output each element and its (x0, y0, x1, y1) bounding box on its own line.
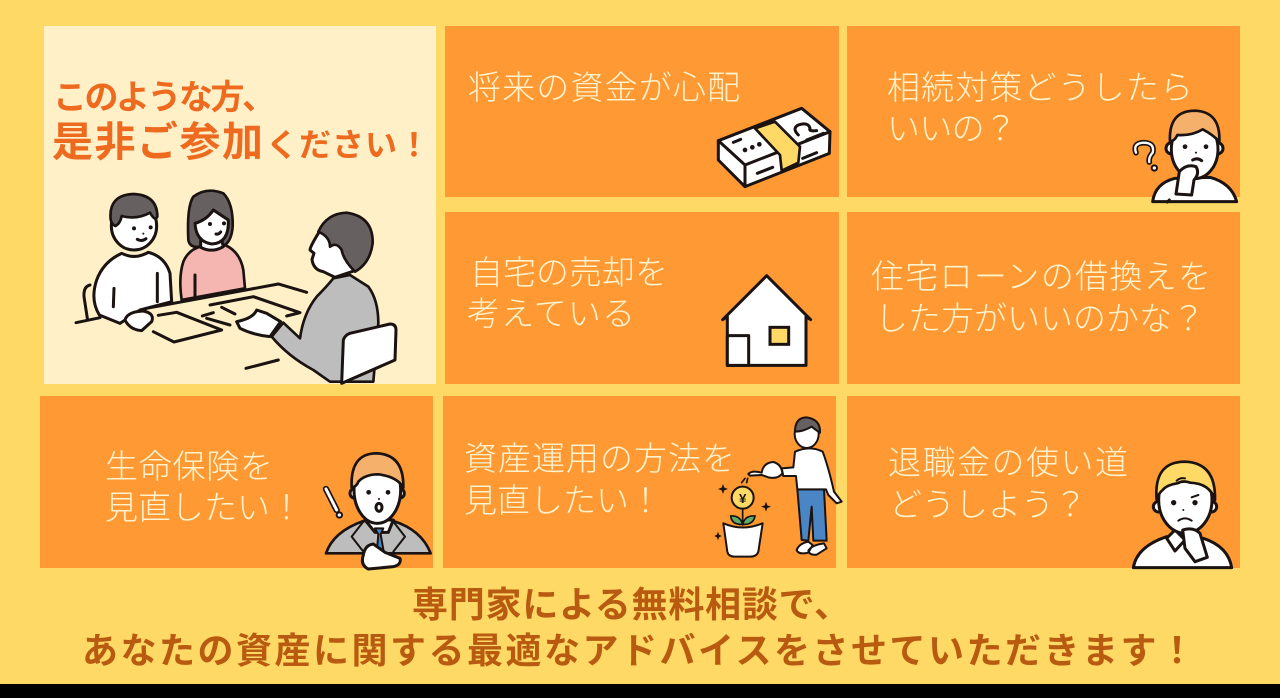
text: home sale (467, 254, 668, 332)
text: retirement money: 退職金の使い道 (888, 444, 1128, 481)
text: asset management (464, 440, 735, 519)
panel: life insurance (40, 396, 433, 569)
text: life insurance: 生命保険を (105, 448, 273, 485)
icon: banknotes (718, 108, 830, 187)
text: retirement money: どうしよう？ (889, 486, 1087, 523)
text: mortgage refinance: 住宅ローンの借換えを (871, 258, 1211, 295)
panel: inheritance (847, 26, 1240, 202)
icon: surprised man in suit (326, 453, 431, 569)
text: mortgage refinance: した方がいいのかな？ (875, 300, 1205, 337)
text: life insurance (105, 448, 303, 526)
panel: retirement money (847, 396, 1240, 568)
text: asset management: 資産運用の方法を (464, 440, 735, 477)
panel: home sale (445, 212, 839, 384)
panel: mortgage refinance (847, 212, 1240, 384)
text: home sale: 自宅の売却を (470, 254, 668, 291)
text: mortgage refinance (871, 258, 1211, 337)
text: future funds: 将来の資金が心配 (468, 69, 740, 106)
heading: invitation: このような方、 (53, 79, 276, 117)
text: inheritance: 相続対策どうしたら (887, 69, 1193, 106)
illustration: consultation scene (76, 191, 396, 383)
footer message (82, 584, 1195, 671)
text: retirement money (888, 444, 1128, 523)
heading: invitation: 是非ご参加 (52, 119, 263, 165)
text: home sale: 考えている (467, 295, 635, 332)
footer message: 専門家による無料相談で、 (412, 584, 850, 625)
panel: asset management (443, 396, 842, 568)
icon: house (723, 276, 811, 365)
icon: person watering coin plant: ¥ (739, 491, 747, 506)
text: asset management: 見直したい！ (464, 482, 662, 519)
footer message: あなたの資産に関する最適なアドバイスをさせていただきます！ (82, 630, 1195, 671)
icon: thinking person (1135, 111, 1237, 202)
heading: invitation (52, 79, 430, 165)
panel: invitation (44, 26, 436, 384)
text: life insurance: 見直したい！ (105, 489, 303, 526)
icon: person watering coin plant (714, 417, 842, 557)
icon: worried person (1133, 462, 1232, 568)
text: inheritance: いいの？ (887, 110, 1017, 147)
heading: invitation: ください！ (266, 127, 430, 163)
panel: future funds (445, 26, 839, 197)
text: inheritance (887, 69, 1193, 147)
